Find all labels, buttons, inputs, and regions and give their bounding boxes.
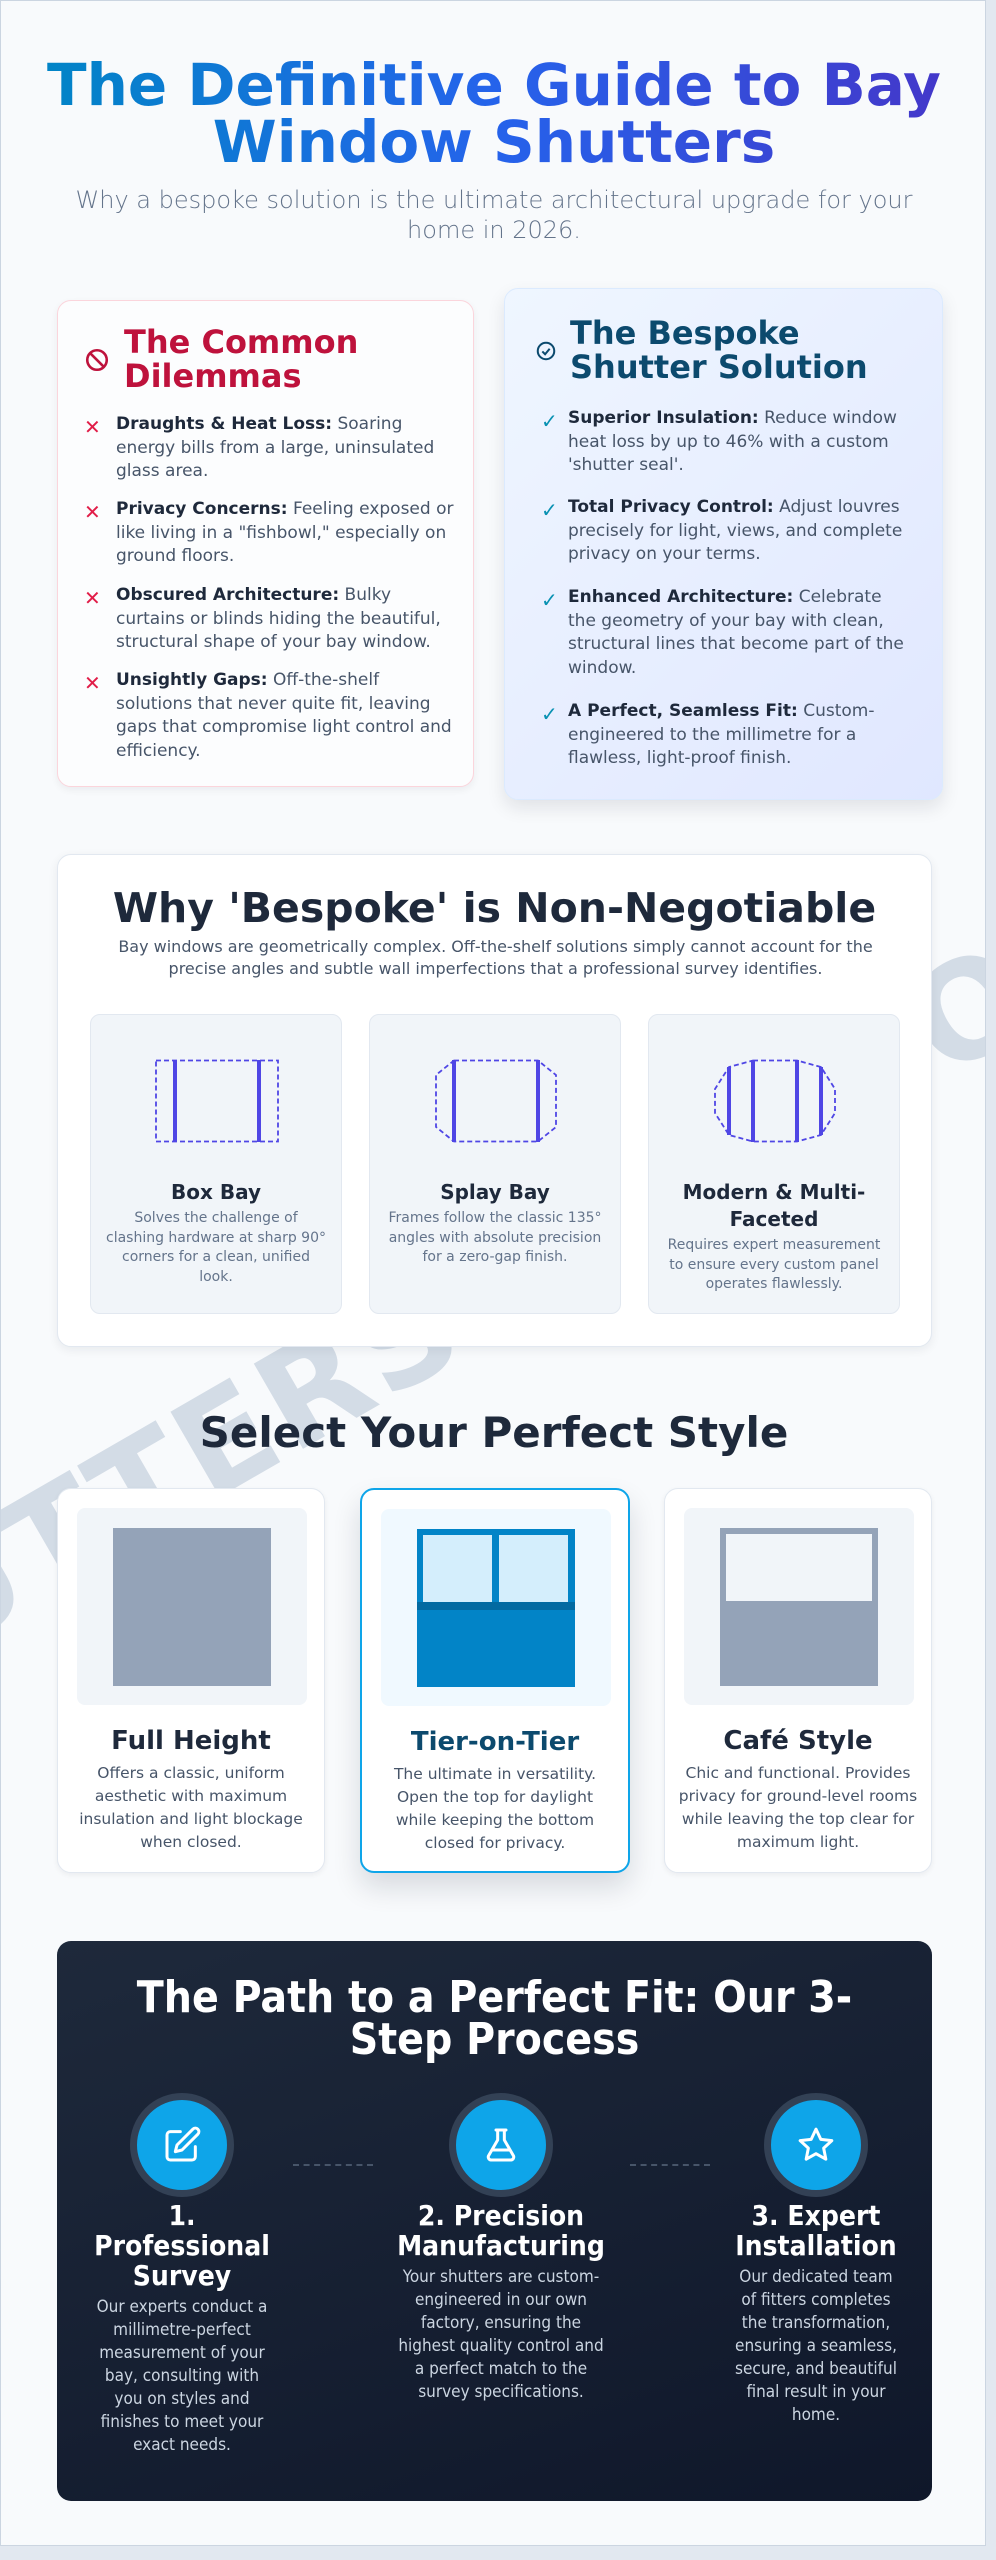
subtitle: home in 2026. bbox=[407, 216, 581, 244]
heading: common dilemmas bbox=[124, 323, 358, 395]
title: step 2: 2. Precision bbox=[418, 2199, 584, 2232]
text: full height: insulation and light blockage bbox=[79, 1810, 303, 1828]
item: privacy control: Total Privacy Control: Adjust louvres bbox=[568, 497, 900, 517]
text: splay bay: Frames follow the classic 135° bbox=[388, 1210, 602, 1226]
text: step 1: you on styles and bbox=[114, 2389, 250, 2409]
step 3 bbox=[735, 2093, 897, 2425]
title: splay bay: Splay Bay bbox=[440, 1180, 550, 1204]
title: The Definitive Guide to Bay bbox=[47, 51, 941, 119]
text: box bay: look. bbox=[199, 1268, 233, 1284]
text: step 1: exact needs. bbox=[133, 2435, 231, 2455]
title bbox=[1, 57, 987, 171]
heading: bespoke solution: The Bespoke bbox=[570, 314, 800, 352]
card: cafe style bbox=[664, 1488, 932, 1873]
icon: full height shutter bbox=[77, 1508, 307, 1705]
text: step 3: secure, and beautiful bbox=[735, 2359, 897, 2379]
text: step 3: the transformation, bbox=[742, 2313, 890, 2333]
text: modern: Requires expert measurement bbox=[668, 1237, 880, 1253]
heading: why bespoke: Why 'Bespoke' is Non-Negotiable bbox=[113, 884, 876, 932]
text: cafe style: while leaving the top clear for bbox=[682, 1810, 914, 1828]
text: modern: to ensure every custom panel bbox=[669, 1256, 879, 1272]
item: insulation: 'shutter seal'. bbox=[568, 455, 684, 475]
text: step 2: factory, ensuring the bbox=[421, 2313, 581, 2333]
icon: ban bbox=[86, 349, 108, 371]
step 1 bbox=[94, 2093, 270, 2455]
text: modern bbox=[668, 1237, 880, 1292]
text: step 2: engineered in our own bbox=[415, 2290, 587, 2310]
text: cafe style bbox=[679, 1764, 917, 1851]
icon: box bay bbox=[155, 1060, 279, 1142]
title: step 3: 3. Expert bbox=[752, 2199, 880, 2232]
item: obscured: Obscured Architecture: Bulky bbox=[116, 585, 391, 605]
title: modern: Faceted bbox=[730, 1207, 818, 1231]
text: modern: operates flawlessly. bbox=[706, 1276, 842, 1292]
item: draughts: glass area. bbox=[116, 461, 208, 481]
item: fit bbox=[541, 701, 874, 768]
arrow: dashed connector 2 bbox=[630, 2164, 710, 2166]
text: step 1: Our experts conduct a bbox=[97, 2297, 267, 2317]
item: insulation: Superior Insulation: Reduce window bbox=[568, 408, 897, 428]
card: full height bbox=[57, 1488, 325, 1873]
item: architecture: Enhanced Architecture: Celebrate bbox=[568, 587, 882, 607]
title: step 3 bbox=[735, 2199, 897, 2262]
item: gaps: ✕ bbox=[84, 671, 101, 695]
heading: process: Step Process bbox=[350, 2014, 639, 2065]
title: step 3: Installation bbox=[735, 2229, 897, 2262]
icon: cafe shutter bbox=[684, 1508, 914, 1705]
text: cafe style: privacy for ground-level rooms bbox=[679, 1787, 917, 1805]
heading: common dilemmas: The Common bbox=[124, 323, 358, 361]
item: fit: engineered to the millimetre for a bbox=[568, 724, 856, 744]
panel: bespoke solution bbox=[504, 288, 943, 800]
item: architecture: window. bbox=[568, 658, 636, 678]
panel: common dilemmas bbox=[57, 300, 474, 787]
text: step 3: home. bbox=[792, 2405, 840, 2425]
icon: check circle bbox=[536, 342, 556, 360]
text: cafe style: Chic and functional. Provides bbox=[686, 1764, 910, 1782]
item: privacy control: precisely for light, views, and complete bbox=[568, 520, 902, 540]
text: step 2 bbox=[398, 2267, 604, 2402]
text: step 1: measurement of your bbox=[99, 2343, 265, 2363]
text: box bay: clashing hardware at sharp 90° bbox=[106, 1230, 326, 1246]
step 2 bbox=[397, 2093, 605, 2402]
title: step 2: Manufacturing bbox=[397, 2229, 605, 2262]
heading: common dilemmas: Dilemmas bbox=[124, 357, 302, 395]
text: tier on tier: The ultimate in versatility. bbox=[394, 1765, 596, 1783]
icon: pencil bbox=[130, 2093, 234, 2197]
item: privacy: Privacy Concerns: Feeling exposed or bbox=[116, 499, 453, 519]
item: gaps: gaps that compromise light control and bbox=[116, 717, 452, 737]
item: architecture bbox=[541, 587, 904, 678]
text: step 2: a perfect match to the bbox=[415, 2359, 587, 2379]
item: privacy: ✕ bbox=[84, 500, 101, 524]
text: step 2: highest quality control and bbox=[398, 2336, 604, 2356]
icon: tier shutter bbox=[381, 1509, 611, 1706]
title: box bay: Box Bay bbox=[171, 1180, 261, 1204]
text: tier on tier: Open the top for daylight bbox=[397, 1788, 593, 1806]
text: step 3: of fitters completes bbox=[741, 2290, 891, 2310]
item: gaps bbox=[84, 670, 452, 760]
item: architecture: structural lines that become part of the bbox=[568, 634, 904, 654]
text: step 3: final result in your bbox=[746, 2382, 886, 2402]
heading: select style: Select Your Perfect Style bbox=[200, 1408, 788, 1457]
item: draughts bbox=[84, 414, 434, 481]
item: privacy bbox=[84, 499, 454, 566]
heading: process bbox=[136, 1972, 852, 2065]
title: step 1: 1. bbox=[168, 2199, 196, 2232]
panel: why bespoke bbox=[57, 854, 932, 1347]
item: obscured: ✕ bbox=[84, 586, 101, 610]
text: box bay bbox=[106, 1210, 326, 1284]
title: Window Shutters bbox=[213, 108, 775, 176]
text: full height: when closed. bbox=[140, 1833, 242, 1851]
text: full height: Offers a classic, uniform bbox=[97, 1764, 285, 1782]
item: insulation: heat loss by up to 46% with a custom bbox=[568, 432, 889, 452]
item: gaps: solutions that never quite fit, leaving bbox=[116, 694, 431, 714]
item: obscured: curtains or blinds hiding the beautiful, bbox=[116, 608, 441, 628]
title: cafe style: Café Style bbox=[723, 1726, 873, 1756]
item: privacy control: ✓ bbox=[541, 498, 558, 522]
icon: flask bbox=[449, 2093, 553, 2197]
item: privacy: ground floors. bbox=[116, 546, 234, 566]
text: step 2: survey specifications. bbox=[418, 2382, 584, 2402]
title: tier on tier: Tier-on-Tier bbox=[411, 1727, 579, 1757]
item: insulation bbox=[541, 408, 897, 475]
text: step 3: ensuring a seamless, bbox=[735, 2336, 897, 2356]
icon: multi-faceted bbox=[714, 1060, 836, 1142]
title: full height: Full Height bbox=[111, 1726, 271, 1756]
card: tier on tier bbox=[360, 1488, 630, 1873]
title: modern bbox=[683, 1180, 865, 1231]
icon: splay bay bbox=[435, 1060, 557, 1142]
heading: bespoke solution: Shutter Solution bbox=[570, 348, 868, 386]
text: tier on tier bbox=[394, 1765, 596, 1852]
text: step 3: Our dedicated team bbox=[739, 2267, 893, 2287]
item: privacy control bbox=[541, 497, 902, 564]
text: box bay: Solves the challenge of bbox=[134, 1210, 298, 1226]
text: tier on tier: closed for privacy. bbox=[425, 1834, 565, 1852]
text: step 1: finishes to meet your bbox=[101, 2412, 263, 2432]
card: splay bay bbox=[369, 1014, 621, 1314]
text: cafe style: maximum light. bbox=[737, 1833, 859, 1851]
item: obscured: structural shape of your bay window. bbox=[116, 632, 431, 652]
item: fit: ✓ bbox=[541, 702, 558, 726]
text: tier on tier: while keeping the bottom bbox=[396, 1811, 594, 1829]
text: step 2: Your shutters are custom- bbox=[403, 2267, 599, 2287]
heading: process: The Path to a Perfect Fit: Our 3- bbox=[137, 1972, 852, 2023]
text: step 1: bay, consulting with bbox=[105, 2366, 259, 2386]
item: fit: A Perfect, Seamless Fit: Custom- bbox=[568, 701, 874, 721]
item: obscured bbox=[84, 585, 441, 652]
heading: bespoke solution bbox=[570, 314, 868, 386]
item: privacy control: privacy on your terms. bbox=[568, 544, 761, 564]
item: privacy: like living in a "fishbowl," especially on bbox=[116, 522, 446, 542]
title: step 1: Professional bbox=[94, 2229, 270, 2262]
card: box bay bbox=[90, 1014, 342, 1314]
text: box bay: corners for a clean, unified bbox=[122, 1249, 310, 1265]
item: draughts: energy bills from a large, uninsulated bbox=[116, 438, 434, 458]
text: step 3 bbox=[735, 2267, 897, 2425]
item: gaps: efficiency. bbox=[116, 740, 201, 760]
title: modern: Modern & Multi- bbox=[683, 1180, 865, 1204]
item: gaps: Unsightly Gaps: Off-the-shelf bbox=[116, 670, 379, 690]
text: full height: aesthetic with maximum bbox=[95, 1787, 287, 1805]
subtitle: Why a bespoke solution is the ultimate architectural upgrade for your bbox=[76, 186, 912, 214]
title: step 2 bbox=[397, 2199, 605, 2262]
icon: star bbox=[764, 2093, 868, 2197]
text: splay bay: for a zero-gap finish. bbox=[422, 1249, 568, 1265]
text: intro: Bay windows are geometrically complex. Off-the-shelf solutions simply cannot account for the precise angles and subtle wall imperfections that a professional survey identifies. bbox=[118, 937, 873, 978]
text: splay bay: angles with absolute precision bbox=[389, 1230, 601, 1246]
item: fit: flawless, light-proof finish. bbox=[568, 748, 791, 768]
arrow: dashed connector 1 bbox=[293, 2164, 373, 2166]
item: architecture: ✓ bbox=[541, 588, 558, 612]
subtitle bbox=[76, 186, 912, 244]
card: modern bbox=[648, 1014, 900, 1314]
title: step 1 bbox=[94, 2199, 270, 2292]
text: full height bbox=[79, 1764, 303, 1851]
text: step 1: millimetre-perfect bbox=[113, 2320, 251, 2340]
item: draughts: Draughts & Heat Loss: Soaring bbox=[116, 414, 402, 434]
panel: process bbox=[57, 1941, 932, 2501]
item: draughts: ✕ bbox=[84, 415, 101, 439]
text: splay bay bbox=[388, 1210, 602, 1265]
item: insulation: ✓ bbox=[541, 409, 558, 433]
title: step 1: Survey bbox=[133, 2259, 231, 2292]
item: architecture: the geometry of your bay with clean, bbox=[568, 610, 884, 630]
text: step 1 bbox=[97, 2297, 267, 2455]
